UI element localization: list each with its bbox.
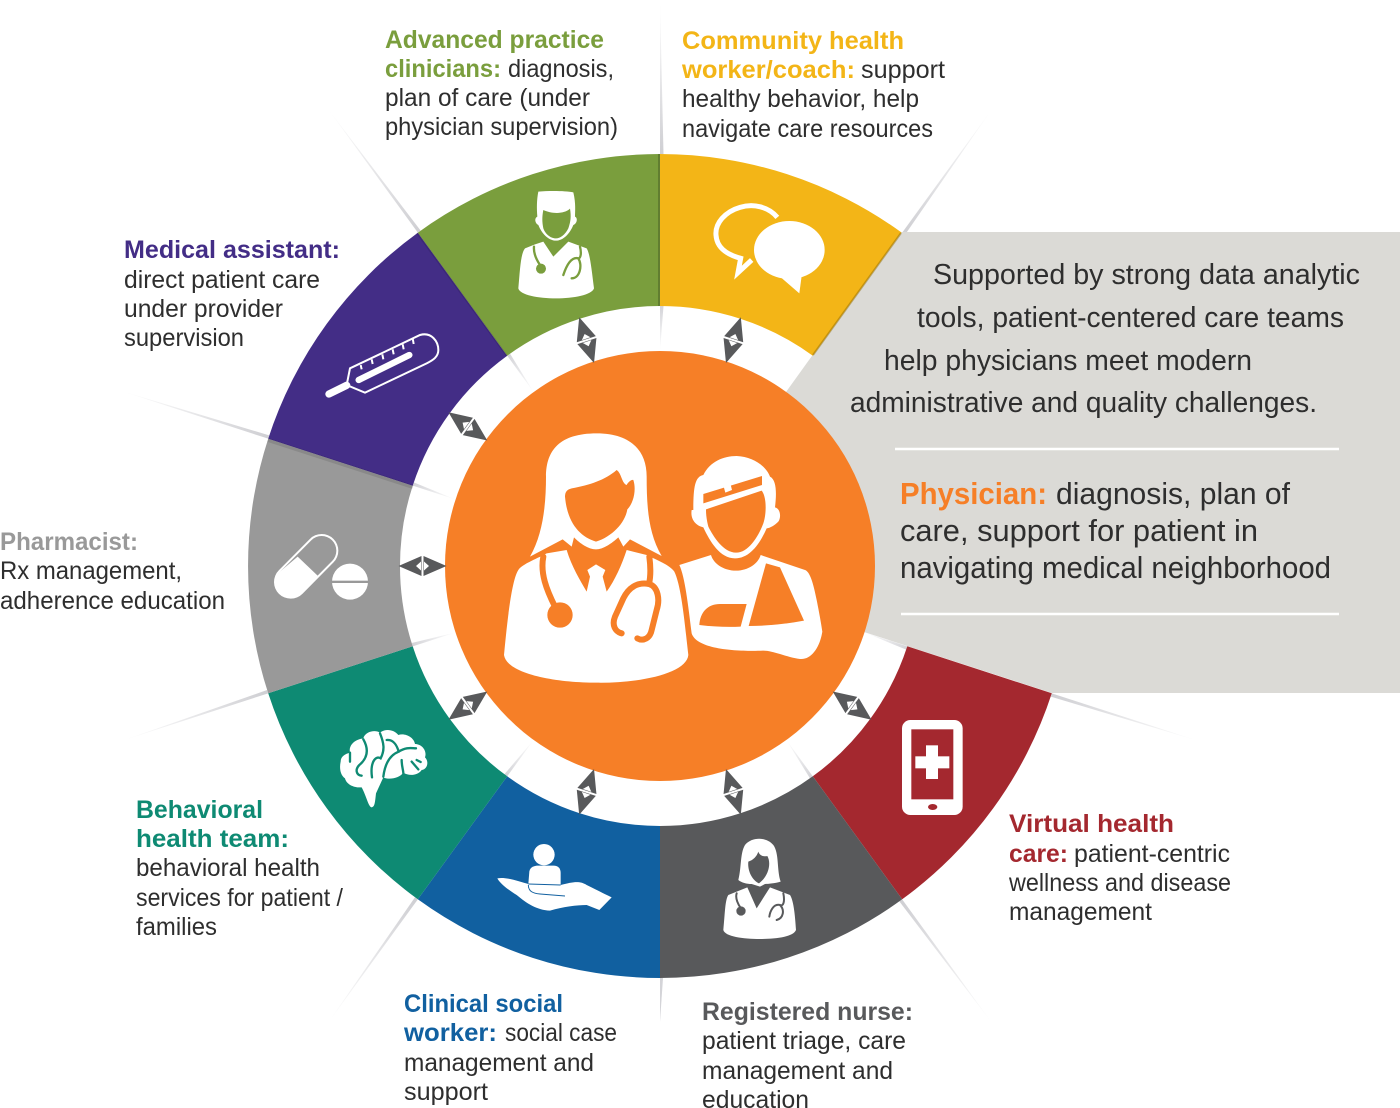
text: community health worker xyxy=(681,27,945,143)
text: virtual health care: management xyxy=(1009,898,1152,926)
text: supporting statement xyxy=(850,259,1360,419)
text: virtual health care: Virtual health xyxy=(1009,810,1174,838)
male patient with arm sling xyxy=(679,456,822,659)
text: pharmacist xyxy=(0,528,225,615)
text: advanced practice clinicians: Advanced practice xyxy=(385,26,604,54)
text: community health worker: support xyxy=(861,56,945,84)
arrow: blue to centre xyxy=(570,766,604,818)
text: behavioral health team: behavioral health xyxy=(136,854,320,882)
text: medical assistant: supervision xyxy=(124,324,244,352)
text: supporting statement: administrative and quality challenges. xyxy=(850,387,1317,419)
text: physician role: diagnosis, plan of xyxy=(1056,476,1290,511)
text: clinical social worker: social case xyxy=(505,1019,617,1047)
icon: clinician with stethoscope xyxy=(518,191,594,298)
text: behavioral health team xyxy=(136,796,343,941)
arrow: dark grey to centre xyxy=(570,314,604,366)
female physician xyxy=(504,433,688,683)
text: physician role xyxy=(900,476,1331,585)
icon: physician and patient xyxy=(504,433,822,683)
text: clinical social worker: support xyxy=(404,1078,488,1106)
arrow: yellow to centre xyxy=(716,766,750,818)
text: supporting statement: help physicians meet modern xyxy=(884,345,1252,377)
text: clinical social worker: Clinical social xyxy=(404,990,563,1018)
arrow: green to centre xyxy=(716,314,750,366)
text: advanced practice clinicians xyxy=(385,26,618,141)
ring segment: advanced practice clinicians xyxy=(418,154,660,356)
text: physician role: Physician: xyxy=(900,476,1047,511)
panel: grey summary background xyxy=(786,232,1400,693)
text: medical assistant xyxy=(124,236,340,352)
ring segment: medical assistant xyxy=(268,233,507,486)
text: advanced practice clinicians: clinicians: xyxy=(385,55,501,83)
text: virtual health care xyxy=(1008,810,1231,926)
text: clinical social worker xyxy=(403,990,617,1106)
icon: thermometer xyxy=(329,334,438,394)
text: virtual health care: patient-centric xyxy=(1074,840,1230,868)
arrow: grey to centre xyxy=(398,556,446,576)
icon: speech bubbles xyxy=(716,206,825,293)
centre circle xyxy=(445,351,875,781)
arrow: purple to centre xyxy=(443,404,493,449)
text: behavioral health team: Behavioral xyxy=(136,796,263,824)
icon: hand holding person xyxy=(497,844,612,911)
arrow: teal to centre xyxy=(443,683,493,728)
text: physician role: navigating medical neighborhood xyxy=(900,550,1331,585)
arrow: red to centre xyxy=(827,683,877,728)
text: pharmacist: adherence education xyxy=(0,587,225,615)
text: behavioral health team: families xyxy=(136,913,217,941)
text: physician role: care, support for patient in xyxy=(900,513,1258,548)
text: registered nurse: Registered nurse: xyxy=(702,998,913,1026)
text: community health worker: navigate care resources xyxy=(682,115,933,143)
text: supporting statement: Supported by strong data analytic xyxy=(933,259,1360,291)
text: advanced practice clinicians: diagnosis, xyxy=(508,55,614,83)
ring segment: behavioral health team xyxy=(268,646,507,899)
text: clinical social worker: worker: xyxy=(403,1019,497,1047)
text: medical assistant: direct patient care xyxy=(124,266,320,294)
text: community health worker: Community health xyxy=(682,27,904,55)
text: behavioral health team: services for patient / xyxy=(136,884,343,912)
text: registered nurse: patient triage, care xyxy=(702,1027,906,1055)
icon: brain xyxy=(340,730,427,807)
ring segment: clinical social worker xyxy=(418,776,660,978)
text: medical assistant: under provider xyxy=(124,295,283,323)
text: virtual health care: wellness and disease xyxy=(1008,869,1231,897)
ring segment: registered nurse xyxy=(660,776,902,978)
text: behavioral health team: health team: xyxy=(136,825,289,853)
text: medical assistant: Medical assistant: xyxy=(124,236,340,264)
text: pharmacist: Pharmacist: xyxy=(0,528,138,556)
text: community health worker: worker/coach: xyxy=(681,56,855,84)
text: registered nurse xyxy=(702,998,913,1108)
text: advanced practice clinicians: physician supervision) xyxy=(385,113,618,141)
icon: pills xyxy=(276,551,369,600)
text: supporting statement: tools, patient-centered care teams xyxy=(917,302,1344,334)
ring segment: community health worker xyxy=(660,154,902,356)
text: community health worker: healthy behavior, help xyxy=(682,85,919,113)
icon: tablet with medical cross xyxy=(902,720,963,815)
ring segment: pharmacist xyxy=(248,439,413,693)
icon: nurse xyxy=(723,839,796,939)
ring segment: virtual health care xyxy=(813,646,1052,899)
text: registered nurse: management and xyxy=(702,1057,893,1085)
text: pharmacist: Rx management, xyxy=(0,557,182,585)
text: advanced practice clinicians: plan of care (under xyxy=(385,84,590,112)
text: clinical social worker: management and xyxy=(404,1049,594,1077)
text: virtual health care: care: xyxy=(1009,840,1068,868)
